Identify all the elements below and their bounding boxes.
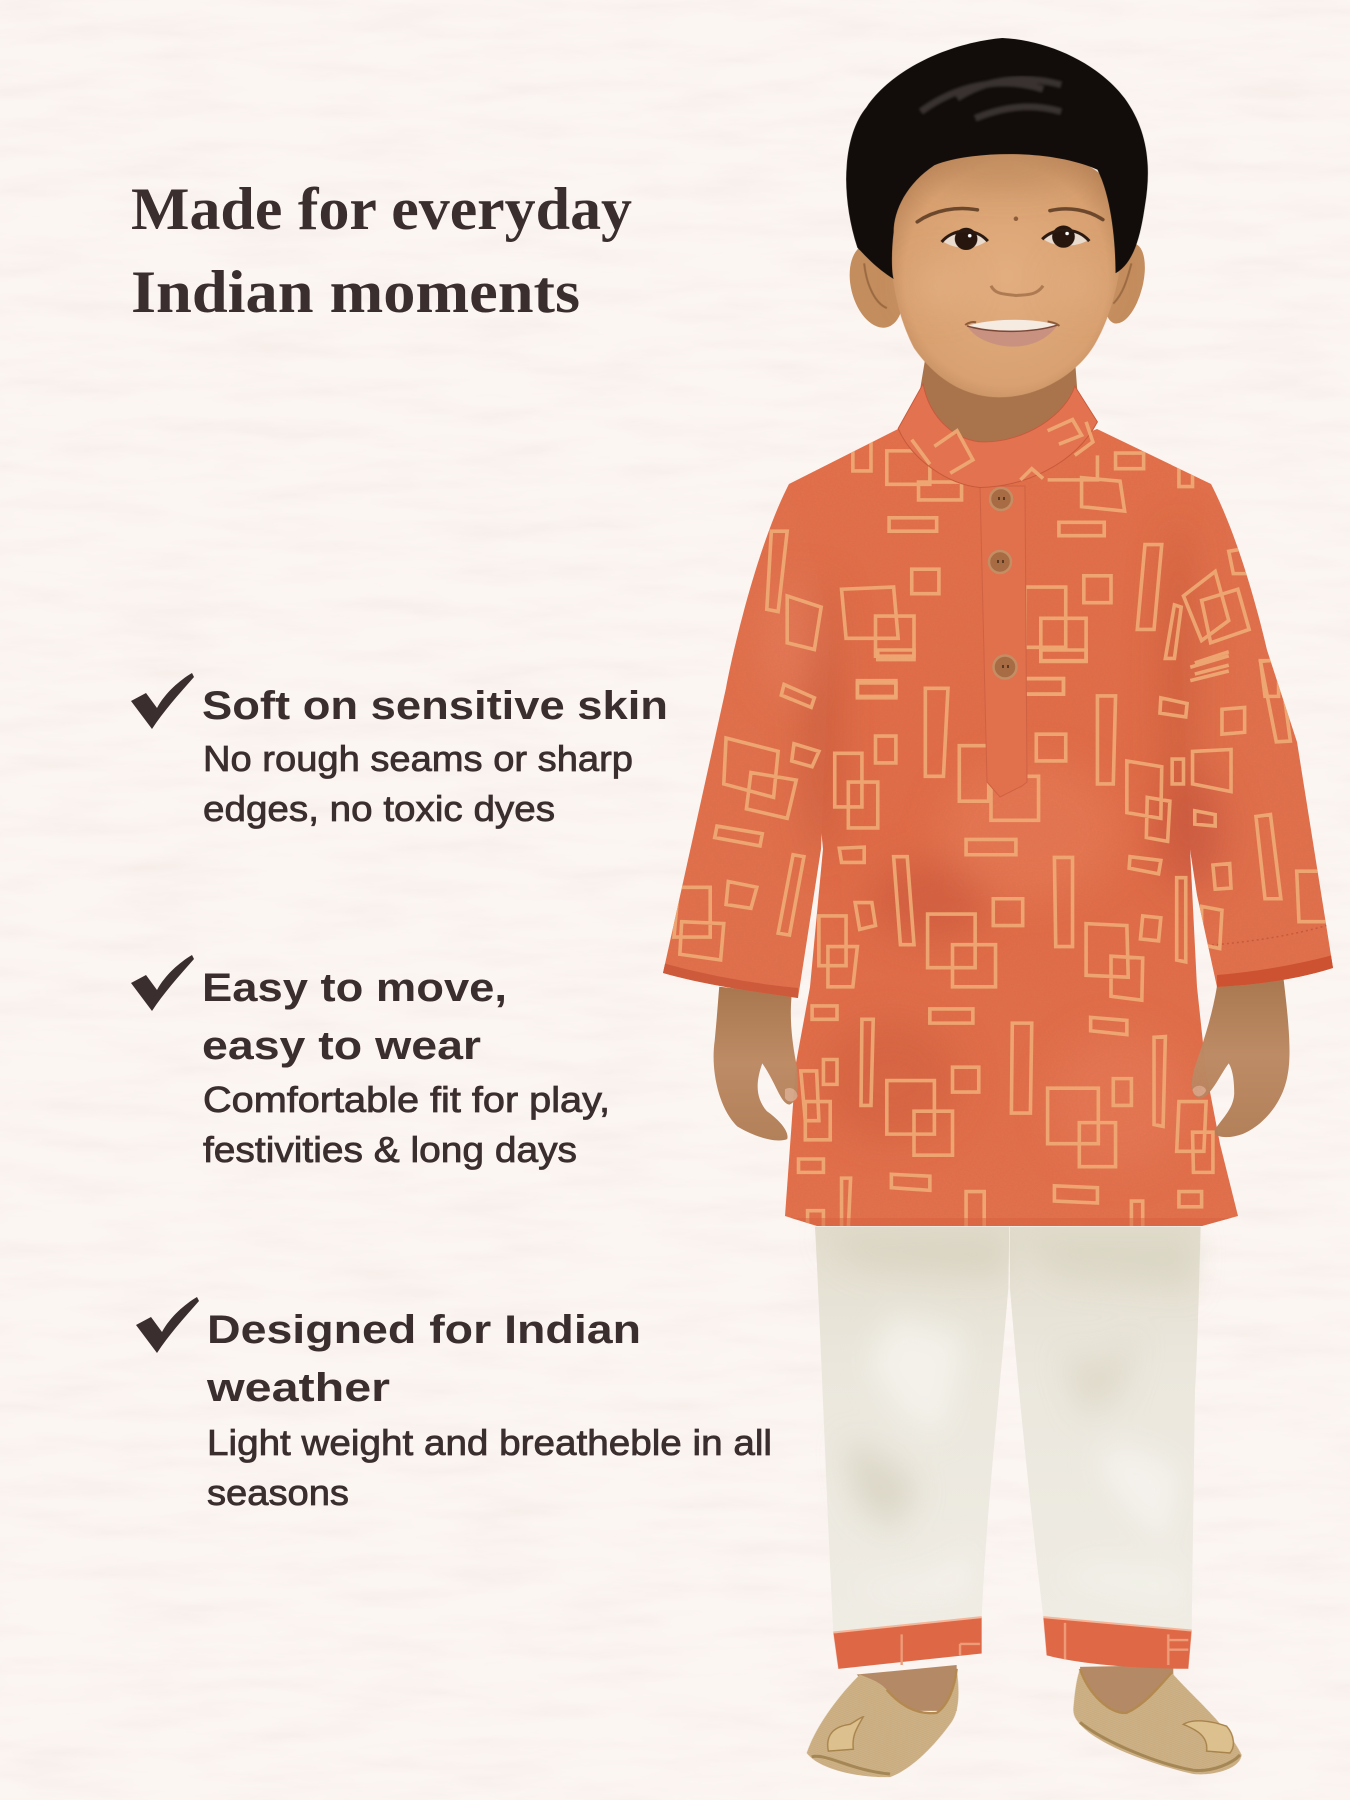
nose bbox=[991, 286, 1043, 296]
benefit: easy to move, easy to wear: Easy to move, bbox=[202, 966, 507, 1010]
benefit: designed for Indian weather bbox=[136, 1297, 772, 1513]
title: Indian moments bbox=[131, 259, 580, 325]
benefit: designed for Indian weather: Designed for Indian bbox=[207, 1308, 641, 1352]
right sleeve bbox=[1180, 484, 1333, 987]
benefit: designed for Indian weather: seasons bbox=[207, 1472, 349, 1513]
icon: check mark bbox=[131, 673, 194, 729]
left trouser leg bbox=[815, 1227, 1009, 1632]
right trouser cuff bbox=[1043, 1617, 1192, 1669]
kurta shading and print bbox=[650, 420, 1350, 1240]
benefit: designed for Indian weather: weather bbox=[206, 1366, 390, 1410]
ears bbox=[841, 238, 912, 333]
right trouser leg bbox=[1010, 1227, 1201, 1631]
benefit: easy to move, easy to wear bbox=[131, 955, 610, 1170]
benefit: easy to move, easy to wear: Comfortable fit for play, bbox=[203, 1079, 610, 1120]
benefit: designed for Indian weather: Light weight and breatheble in all bbox=[207, 1422, 772, 1463]
benefit: soft on sensitive skin bbox=[131, 673, 668, 829]
benefit: soft on sensitive skin: No rough seams or sharp bbox=[203, 738, 633, 779]
neck bbox=[920, 360, 1078, 458]
boy illustration bbox=[650, 38, 1350, 1777]
title: Made for everyday bbox=[131, 176, 632, 242]
icon: check mark bbox=[136, 1297, 199, 1353]
benefit: easy to move, easy to wear: easy to wear bbox=[202, 1024, 481, 1068]
head bbox=[841, 38, 1152, 487]
title bbox=[131, 176, 632, 325]
benefit: soft on sensitive skin: edges, no toxic dyes bbox=[203, 788, 555, 829]
benefit: soft on sensitive skin: Soft on sensitive skin bbox=[202, 684, 668, 728]
kurta collar bbox=[898, 384, 1097, 487]
sleeve cuff shading bbox=[1217, 955, 1333, 987]
trousers bbox=[807, 1227, 1242, 1777]
left sleeve bbox=[663, 484, 830, 998]
right hand bbox=[1192, 975, 1290, 1137]
left hand bbox=[714, 987, 798, 1140]
buttons bbox=[989, 488, 1016, 678]
icon: check mark bbox=[131, 955, 194, 1011]
kurta body bbox=[785, 429, 1238, 1226]
mouth bbox=[965, 320, 1059, 347]
ankles bbox=[857, 1665, 1173, 1715]
right shoe bbox=[1073, 1669, 1242, 1774]
eyes bbox=[942, 225, 1089, 250]
kurta placket bbox=[980, 486, 1027, 797]
hem shading bbox=[785, 1218, 1238, 1226]
left shoe bbox=[807, 1669, 958, 1777]
benefit: easy to move, easy to wear: festivities & long days bbox=[203, 1129, 577, 1170]
eyebrows bbox=[917, 208, 1103, 222]
bindi bbox=[1014, 217, 1018, 221]
left trouser cuff bbox=[833, 1617, 982, 1669]
lower print bbox=[674, 650, 1333, 1228]
face bbox=[889, 145, 1123, 397]
upper print bbox=[767, 442, 1279, 696]
hair bbox=[846, 38, 1148, 279]
hands bbox=[714, 975, 1290, 1140]
